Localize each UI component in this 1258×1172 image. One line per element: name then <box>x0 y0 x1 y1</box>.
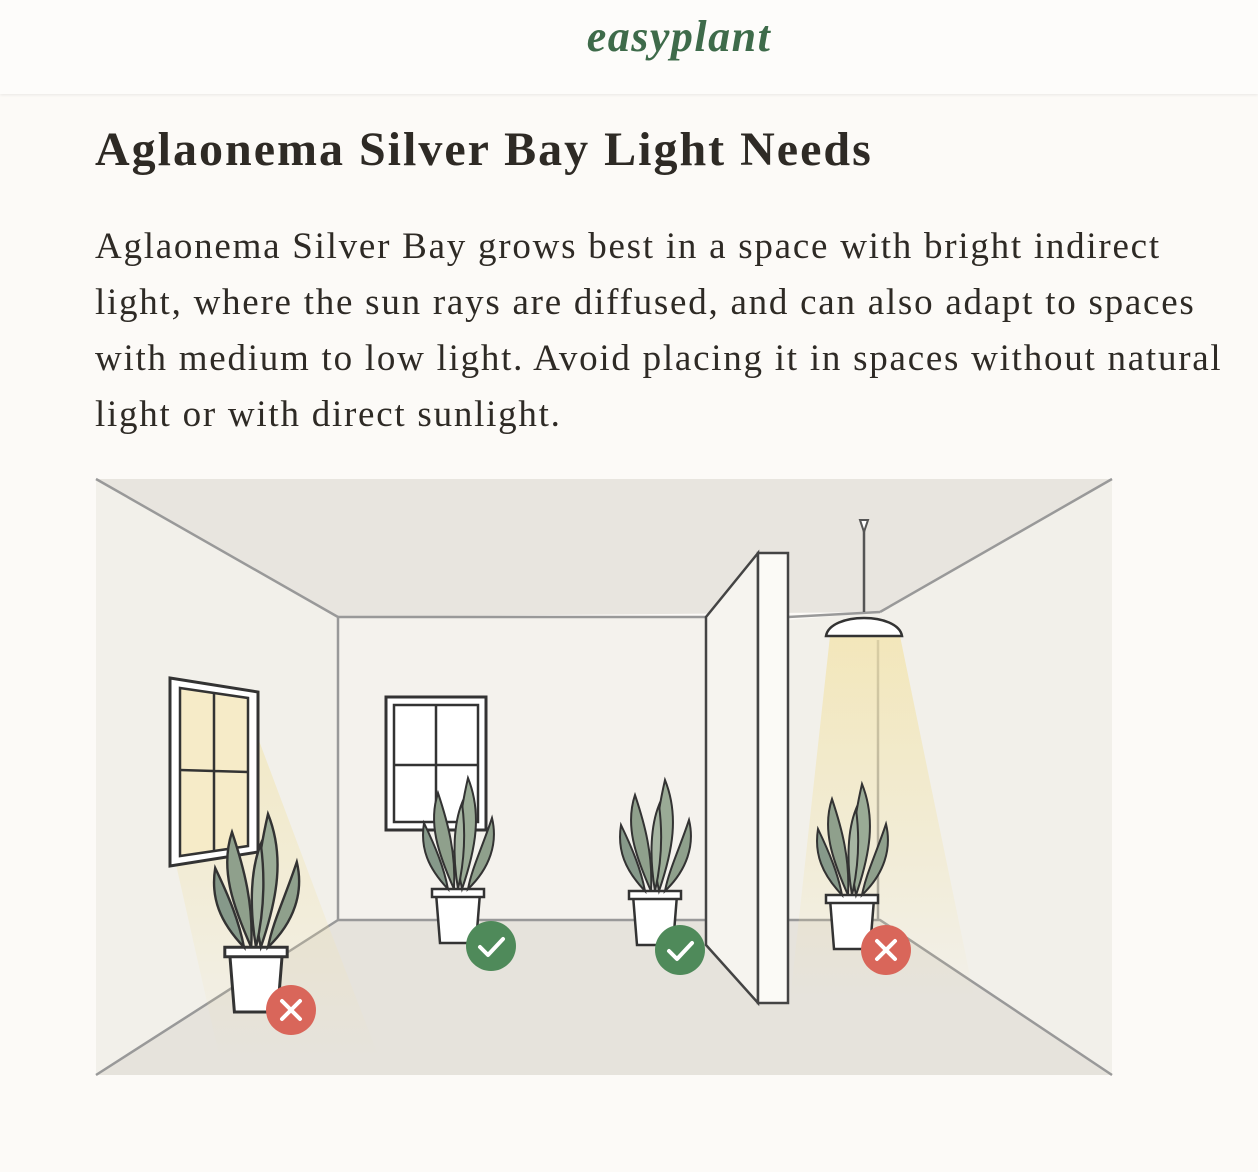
plant 4 lamp <box>817 784 888 949</box>
window back <box>386 697 486 830</box>
text block: light, where the sun rays are diffused, and can also adapt to spaces <box>95 282 1196 323</box>
floor <box>96 920 1112 1075</box>
right wall <box>788 479 1112 1075</box>
lamp and beam <box>790 520 975 1000</box>
logo: easyplant <box>587 12 771 61</box>
badge x 1 <box>266 985 316 1035</box>
text block: light or with direct sunlight. <box>95 394 562 435</box>
plant 3 <box>620 780 691 945</box>
partition wall <box>706 553 788 1003</box>
text block: with medium to low light. Avoid placing it in spaces without natural <box>95 338 1222 379</box>
text block: Aglaonema Silver Bay grows best in a space with bright indirect <box>95 226 1161 267</box>
badge check 2 <box>655 925 705 975</box>
left wall <box>96 479 338 1075</box>
header <box>0 0 1258 94</box>
text block <box>95 226 1222 435</box>
light beam: window <box>175 730 380 1060</box>
title: Aglaonema Silver Bay Light Needs <box>95 123 873 176</box>
badge x 2 <box>861 925 911 975</box>
back wall <box>338 617 738 920</box>
plant 1 direct sun <box>214 814 299 1012</box>
plant 2 <box>423 778 494 943</box>
ceiling <box>96 479 1112 617</box>
badge check 1 <box>466 921 516 971</box>
window left <box>170 678 258 866</box>
